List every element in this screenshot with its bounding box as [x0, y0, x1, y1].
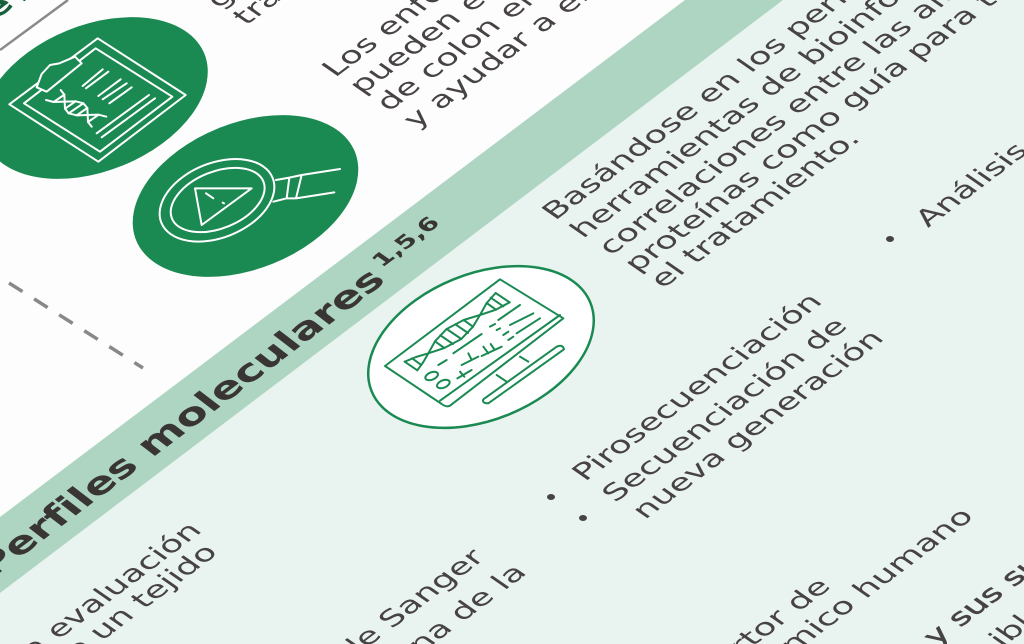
bullet list: Pirosecuenciación: [547, 289, 891, 524]
bullet list: Pirosecuenciación: Secuenciación de: [595, 313, 855, 507]
icon: clipboard with DNA: [0, 0, 232, 210]
icon: magnifying glass with warning triangle: [109, 84, 382, 308]
section heading: Perfiles moleculares: 1,5,6: [366, 212, 446, 271]
partial green heading, top left: [0, 0, 58, 24]
divider line, top left: [0, 0, 68, 50]
bullet list: Pirosecuenciación: nueva generación: [625, 325, 891, 524]
icon: sequencing report with DNA: [344, 235, 618, 459]
bullet list: Pirosecuenciación: Pirosecuenciación: [565, 289, 829, 486]
text block: Basándose en los perfiles: el tratamiento.: [643, 126, 867, 293]
heading band: [0, 0, 783, 593]
dashed divider: [9, 283, 143, 368]
